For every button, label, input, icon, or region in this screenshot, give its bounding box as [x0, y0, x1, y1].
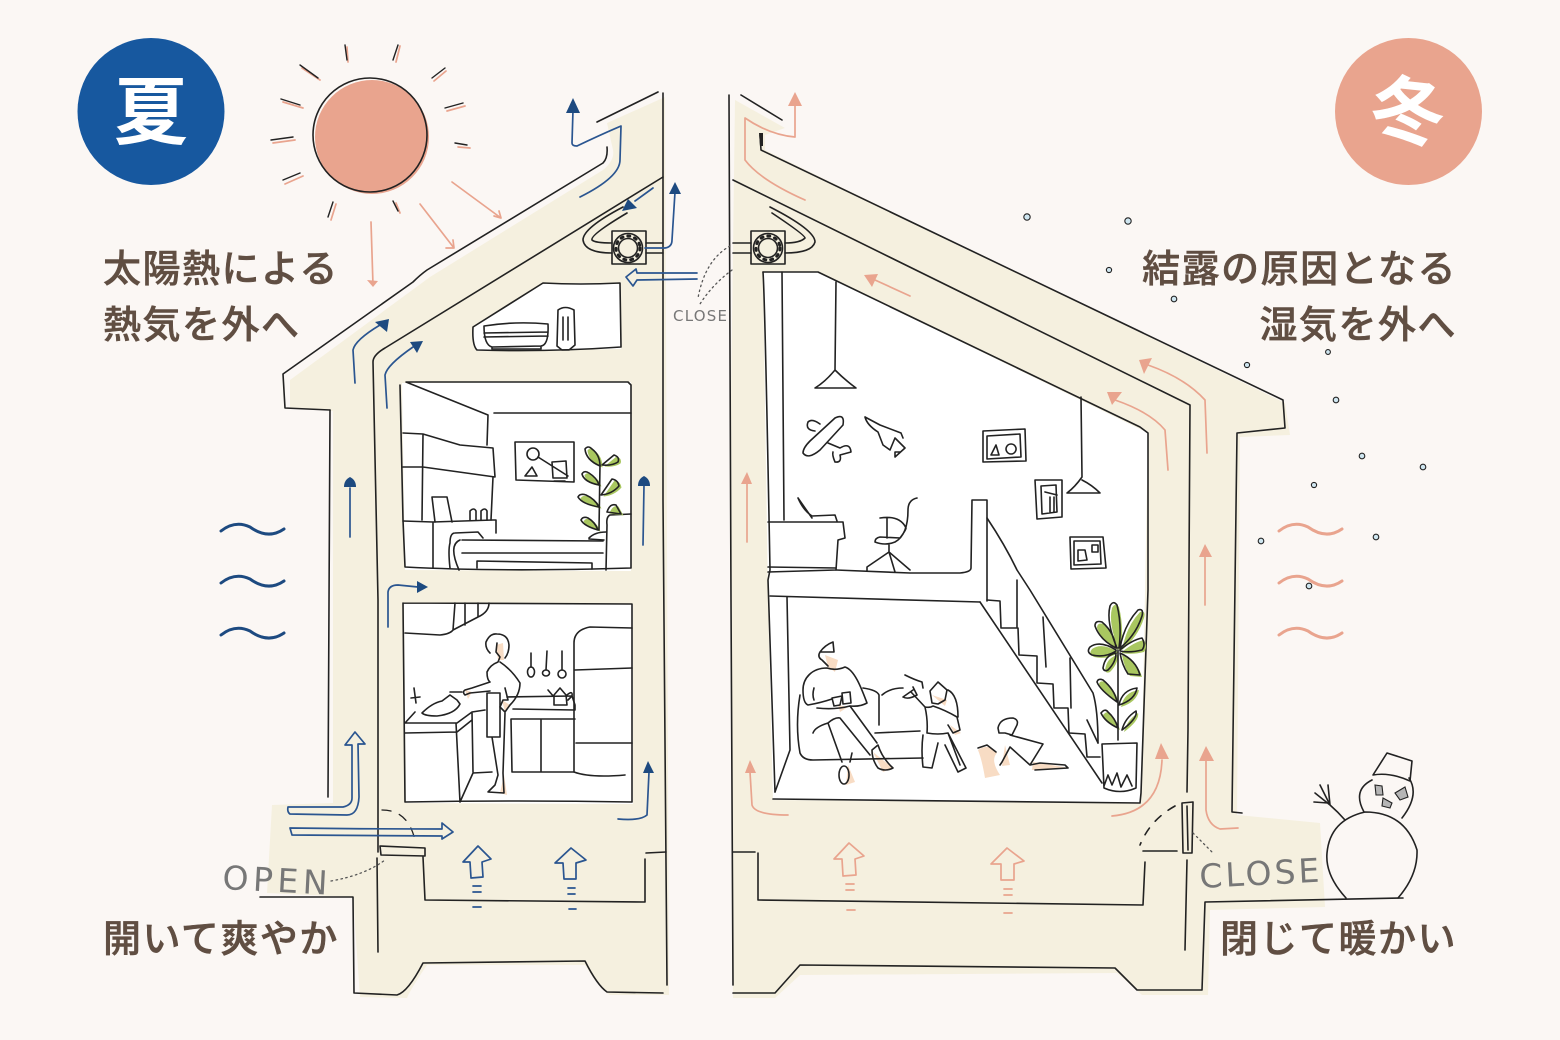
panel: summer house: [222, 92, 697, 998]
arrow: floor up arrow 2: [555, 848, 586, 909]
father on sofa: [798, 642, 923, 785]
living room white: [763, 272, 1148, 803]
arrow: into attic fan duct: [622, 188, 653, 211]
vent flap open: [380, 810, 425, 856]
snowman: [1314, 753, 1417, 898]
arrow: intake hollow arrow straight: [290, 823, 453, 839]
house wall fill (winter): [731, 100, 1325, 998]
fan with duct (summer): [583, 207, 663, 264]
heading: summer heat: 太陽熱による: [103, 249, 339, 291]
panel: winter house: [673, 92, 1403, 998]
kitchen room white: [404, 603, 633, 804]
desk with laptop: [768, 498, 845, 572]
pendant lamp 1: [815, 282, 856, 388]
house wall fill (summer): [267, 97, 669, 998]
arrow: lower left up pink: [745, 760, 788, 815]
upstairs bedroom drawing: [400, 382, 631, 570]
child with plane: [903, 675, 966, 772]
house outline (summer): [260, 92, 667, 995]
arrow: floor up pink 2: [991, 848, 1024, 913]
arrow: vent exhaust up: [566, 98, 621, 197]
picture on wall: [515, 442, 574, 482]
heading: winter moisture: 結露の原因となる: [1142, 249, 1457, 291]
arrow: inside lower right pink: [1112, 743, 1169, 816]
cook figure: [464, 634, 520, 795]
heading: open: 開いて爽やか: [103, 919, 339, 961]
hanging toy plane 2: [865, 417, 905, 457]
wind lines: winter: [1279, 524, 1342, 638]
arrow: floor up arrow 1: [463, 846, 491, 907]
arrow: left wall to roof: [353, 319, 389, 383]
arrow: hollow left to attic: [626, 269, 697, 286]
crawling child: [998, 718, 1070, 770]
arrow: fan exhaust up: [645, 182, 681, 248]
dotted leader: CLOSE: [1193, 833, 1214, 854]
arrow: left wall up: [344, 477, 356, 537]
badge: winter: [1335, 38, 1482, 185]
upstairs room white: [402, 382, 631, 571]
dotted leader: OPEN: [331, 860, 385, 881]
arrow: inner wall to roof: [385, 341, 423, 408]
kitchen drawing: [403, 603, 632, 802]
attic outline and air conditioner: [473, 283, 621, 351]
wind lines: summer: [221, 524, 284, 638]
food on counter: [411, 688, 462, 716]
arrow: floor up pink 1: [834, 843, 864, 910]
vent flap closed: [1140, 802, 1193, 853]
arrow: left wall up pink: [741, 472, 752, 542]
arrow: vent exhaust pink: [745, 92, 805, 200]
hanging toy plane 1: [803, 417, 851, 462]
wall picture 3: [1070, 537, 1106, 569]
label: small CLOSE: CLOSE: [673, 307, 727, 325]
wall picture 2: [1035, 480, 1062, 519]
heat arrows: [367, 182, 501, 287]
arrow: right lower wall up: [618, 761, 654, 820]
arrow: inner roof pink: [1107, 392, 1168, 470]
pendant lamp 2: [1067, 397, 1100, 493]
arrow: right wall up pink: [1199, 544, 1212, 605]
arrow: outer lower right pink: [1199, 746, 1238, 829]
arrow: intake hollow arrow curved: [288, 732, 365, 815]
attic room: [473, 283, 621, 351]
kettle: [548, 688, 572, 705]
label: OPEN: OPEN: [222, 858, 328, 902]
fan with duct (winter): [733, 207, 815, 264]
heading: summer heat line 2: 熱気を外へ: [103, 305, 301, 347]
label: CLOSE: CLOSE: [1198, 851, 1320, 896]
living room outline and stairs: [763, 272, 1148, 803]
dotted leader: small CLOSE: [698, 246, 732, 304]
desk chair: [867, 498, 917, 572]
heading: close: 閉じて暖かい: [1220, 919, 1457, 961]
snow dots: [1024, 214, 1426, 589]
badge: summer: 夏: [114, 71, 188, 154]
heading: winter moisture line 2: 湿気を外へ: [1259, 305, 1457, 347]
arrow: to second floor: [388, 581, 428, 627]
arrow: right wall up: [638, 476, 650, 545]
sun rays: [271, 45, 470, 220]
badge: winter: 冬: [1367, 67, 1449, 158]
arrow: outer roof pink: [1139, 358, 1207, 453]
sun: [271, 45, 501, 287]
wall picture 1: [983, 429, 1026, 462]
dog: [978, 745, 1000, 778]
house outline (winter): [729, 95, 1403, 993]
arrow: under ceiling pink: [864, 274, 910, 296]
plant upstairs: [578, 447, 624, 532]
badge: summer: [78, 38, 224, 185]
potted plant: [1088, 603, 1146, 792]
hanging utensils: [528, 651, 566, 678]
